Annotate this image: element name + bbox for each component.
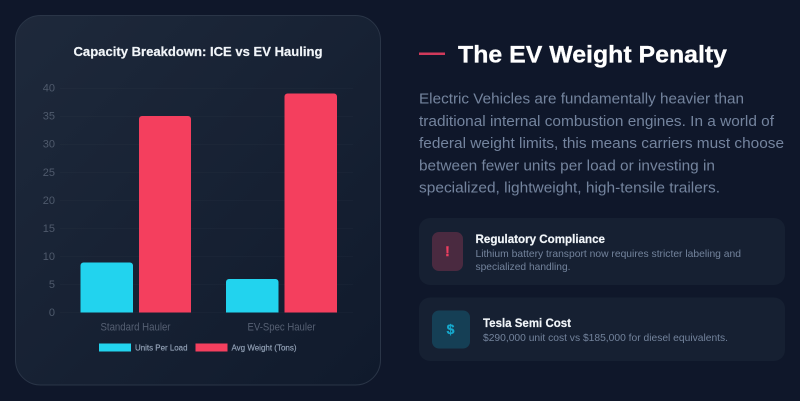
heading text: The EV Weight Penalty [458, 42, 728, 68]
panel: chart card [16, 16, 380, 385]
y axis labels: 20 [43, 195, 55, 207]
y axis labels: 15 [43, 223, 55, 235]
heading accent dash [419, 52, 445, 55]
y axis labels: 5 [49, 279, 55, 291]
panel: regulatory compliance [419, 218, 785, 285]
bars: Standard Hauler [80, 116, 191, 312]
bar chart [43, 82, 353, 352]
tesla description: $290,000 unit cost vs $185,000 for diesel equivalents. [483, 332, 728, 344]
body paragraph: federal weight limits, this means carriers must choose [419, 135, 784, 152]
body paragraph: specialized, lightweight, high-tensile trailers. [419, 180, 720, 196]
regulatory description [476, 248, 741, 273]
y axis labels: 0 [49, 307, 55, 319]
body paragraph: between fewer units per load or investing in [419, 158, 715, 174]
tesla title: Tesla Semi Cost [483, 316, 571, 330]
icon: exclamation [432, 232, 463, 271]
x axis labels: EV-Spec Hauler [248, 322, 316, 334]
icon: dollar: $ [447, 321, 455, 337]
icon: exclamation: ! [445, 243, 450, 259]
regulatory title: Regulatory Compliance [476, 232, 605, 246]
y axis labels [43, 82, 55, 319]
y axis labels: 35 [43, 110, 55, 122]
legend: Units Per Load [135, 344, 188, 352]
y axis labels: 25 [43, 167, 55, 179]
bars: EV-Spec Hauler [226, 94, 337, 312]
body paragraph [419, 90, 784, 196]
panel: tesla semi cost [419, 298, 785, 361]
body paragraph: traditional internal combustion engines. In a world of [419, 113, 775, 130]
x axis labels: Standard Hauler [100, 322, 171, 334]
y axis labels: 10 [43, 251, 55, 263]
legend: Avg Weight (Tons) [232, 344, 297, 352]
x axis labels [100, 322, 316, 334]
y axis labels: 30 [43, 138, 55, 150]
regulatory description: specialized handling. [476, 261, 570, 273]
legend [99, 344, 297, 352]
y axis labels: 40 [43, 82, 55, 94]
regulatory description: Lithium battery transport now requires stricter labeling and [476, 248, 741, 260]
chart title: Capacity Breakdown: ICE vs EV Hauling [74, 44, 323, 59]
body paragraph: Electric Vehicles are fundamentally heavier than [419, 90, 744, 108]
icon: dollar [432, 310, 470, 348]
